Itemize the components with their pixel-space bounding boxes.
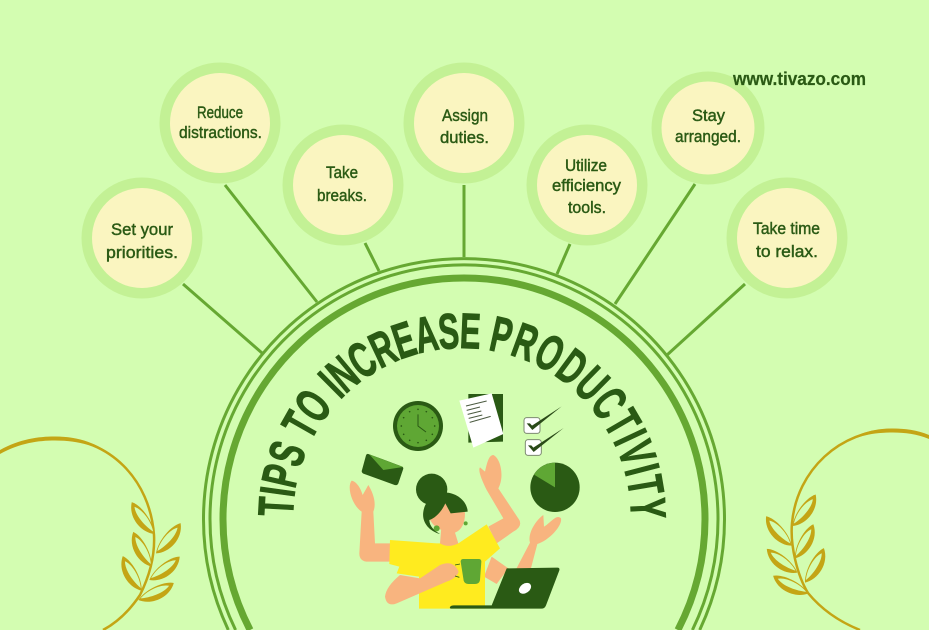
illustration: woman multitasking (350, 393, 580, 609)
forearm holding cup (385, 563, 459, 604)
icon: checklist (524, 406, 564, 455)
decorative wreath: right (760, 428, 929, 630)
tip bubble: assign duties (404, 62, 524, 184)
shirt (389, 524, 500, 609)
earrings (434, 521, 468, 531)
neck and face (430, 500, 465, 546)
icon: laptop (450, 568, 559, 609)
tip bubble: utilize efficiency tools (526, 124, 648, 246)
icon: document (459, 393, 503, 448)
tip bubble: assign duties: Assign (442, 106, 488, 125)
concentric rings of the central semicircle (203, 259, 724, 630)
tip bubble: take time to relax: to relax. (756, 242, 818, 261)
tip bubble: take breaks: Take (326, 163, 358, 182)
icon: clock (393, 401, 443, 451)
icon: mug (455, 559, 481, 584)
title: curved heading: TIPS TO INCREASE PRODUCTIVITY (258, 313, 666, 518)
tip bubble: set your priorities: priorities. (106, 243, 178, 262)
tip bubble: take breaks: breaks. (317, 186, 367, 205)
back arm behind laptop (484, 557, 508, 584)
tip bubble: utilize efficiency tools: Utilize (565, 156, 607, 175)
tip bubble: take time to relax: Take time (753, 219, 820, 238)
tip bubble: reduce distractions: Reduce (197, 103, 243, 122)
tip bubble: set your priorities (82, 178, 202, 298)
tip bubble: assign duties: duties. (440, 128, 489, 147)
tip bubble: set your priorities: Set your (111, 220, 173, 239)
tip bubble: utilize efficiency tools: efficiency (552, 176, 621, 195)
tip bubble: stay arranged: Stay (692, 106, 725, 125)
tip bubble: stay arranged: arranged. (675, 127, 741, 146)
website url: www.tivazo.com (732, 69, 866, 89)
tip bubble: reduce distractions: distractions. (179, 123, 262, 142)
tip bubble: take time to relax (726, 178, 848, 298)
tip bubble: stay arranged (652, 72, 764, 184)
decorative wreath: left (0, 436, 187, 630)
connector lines (183, 184, 745, 355)
left raised arm (350, 481, 393, 562)
icon: envelope (362, 454, 403, 485)
upper right raised arm (479, 455, 520, 543)
tip bubble: reduce distractions (160, 62, 280, 184)
lower right arm with hand (516, 515, 561, 569)
tip bubble: take breaks (282, 124, 404, 246)
icon: pie chart (530, 463, 580, 512)
tip bubble: utilize efficiency tools: tools. (568, 198, 606, 217)
hair and bun (416, 474, 468, 534)
